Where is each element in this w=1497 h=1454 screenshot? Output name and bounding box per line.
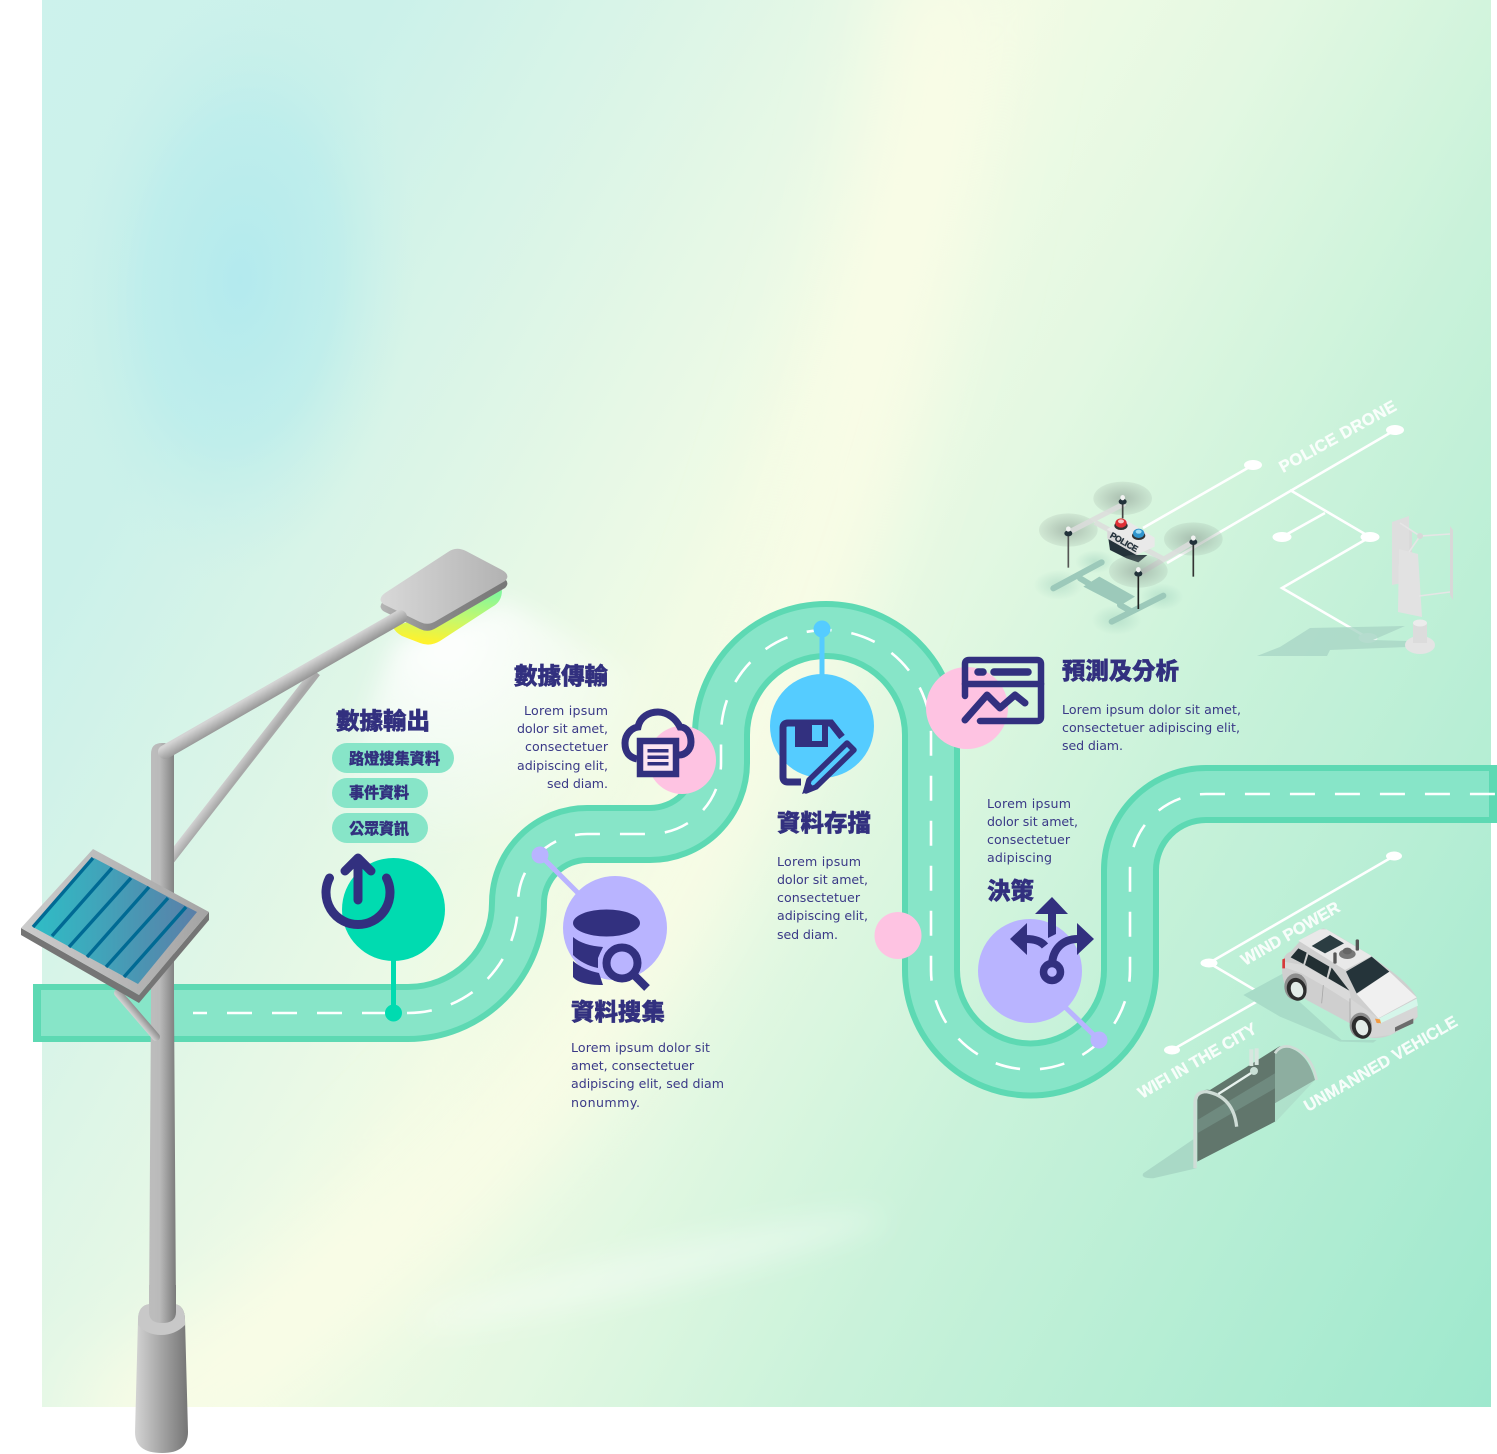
icon: database search xyxy=(573,910,647,988)
label: unmanned vehicle: UNMANNED VEHICLE xyxy=(1301,1013,1461,1115)
text block: data storage: sed diam. xyxy=(777,927,838,942)
text block: data search xyxy=(571,998,724,1110)
icon: analytics window xyxy=(965,660,1041,721)
label: police drone: POLICE DRONE xyxy=(1276,397,1400,476)
icon: floppy disk and pencil xyxy=(783,723,854,794)
heading and pills: data output: 路燈搜集資料 xyxy=(349,750,440,768)
text block: data storage: consectetuer xyxy=(777,890,861,905)
text block: data search: nonummy. xyxy=(571,1095,640,1110)
text block: data transmission xyxy=(514,663,609,791)
text block: data transmission: dolor sit amet, xyxy=(517,721,608,736)
text block: data transmission: adipiscing elit, xyxy=(517,758,608,773)
heading and pills: data output: 公眾資訊 xyxy=(349,820,409,838)
text block: decision: adipiscing xyxy=(987,850,1052,865)
text block: data transmission: Lorem ipsum xyxy=(524,703,608,718)
text block: decision: Lorem ipsum xyxy=(987,796,1071,811)
text block: decision xyxy=(987,796,1078,904)
illustration: unmanned vehicle xyxy=(1243,928,1418,1043)
heading and pills: data output: 數據輸出 xyxy=(336,708,430,734)
circle: cloud step pink xyxy=(648,726,716,794)
step: data output marker xyxy=(342,858,445,1022)
step: data storage marker xyxy=(770,620,874,778)
step: data search marker xyxy=(532,846,667,980)
text block: data transmission: consectetuer xyxy=(525,739,609,754)
illustration: wind turbine xyxy=(1257,516,1453,656)
connector lines: drone and wind power xyxy=(1143,425,1404,643)
illustration: street lamp xyxy=(118,549,507,1453)
illustration: solar panel xyxy=(21,849,209,1003)
text block: data storage xyxy=(777,809,871,942)
label: wifi in the city: WIFI IN THE CITY xyxy=(1135,1020,1260,1102)
text block: data storage: 資料存擋 xyxy=(777,809,871,836)
heading and pills: data output: 事件資料 xyxy=(349,784,409,802)
circle: road marker pink xyxy=(874,912,922,959)
text block: data storage: adipiscing elit, xyxy=(777,908,868,923)
text block: data search: adipiscing elit, sed diam xyxy=(571,1076,724,1091)
heading and pills: data output xyxy=(332,708,454,843)
connector lines: vehicle and wifi xyxy=(1164,852,1402,1054)
text block: data search: 資料搜集 xyxy=(571,998,665,1025)
road xyxy=(33,630,1497,1070)
illustration: wifi tunnel shelter xyxy=(1143,1046,1317,1178)
text block: forecast and analysis: 預測及分析 xyxy=(1062,658,1179,684)
text block: forecast and analysis: Lorem ipsum dolor sit amet, xyxy=(1062,702,1241,717)
illustration: police drone xyxy=(1033,482,1223,635)
text block: forecast and analysis: sed diam. xyxy=(1062,738,1123,753)
circle: analysis step pink xyxy=(926,667,1008,749)
text block: decision: 決策 xyxy=(987,877,1034,904)
text block: decision: dolor sit amet, xyxy=(987,814,1078,829)
label: wind power: WIND POWER xyxy=(1238,898,1343,969)
illustration: police drone: POLICE xyxy=(1108,530,1140,554)
icon: decision arrows xyxy=(1010,897,1094,980)
text block: data transmission: sed diam. xyxy=(547,776,608,791)
text block: data transmission: 數據傳輸 xyxy=(514,663,608,689)
text block: data search: Lorem ipsum dolor sit xyxy=(571,1040,710,1055)
text block: forecast and analysis xyxy=(1062,658,1241,753)
step: decision marker xyxy=(978,919,1108,1048)
icon: power upload xyxy=(326,858,390,925)
text block: decision: consectetuer xyxy=(987,832,1071,847)
text block: forecast and analysis: consectetuer adipiscing elit, xyxy=(1062,720,1240,735)
text block: data search: amet, consectetuer xyxy=(571,1058,695,1073)
text block: data storage: dolor sit amet, xyxy=(777,872,868,887)
text block: data storage: Lorem ipsum xyxy=(777,854,861,869)
icon: cloud document xyxy=(625,712,691,774)
